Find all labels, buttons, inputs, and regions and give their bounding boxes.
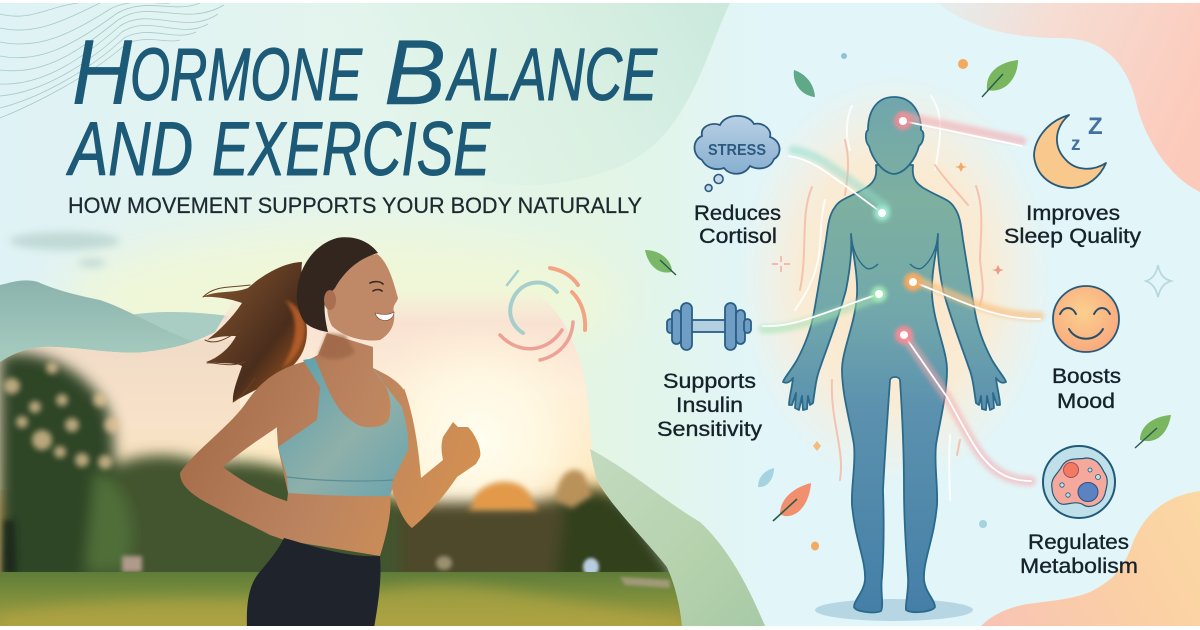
decorative leaves <box>645 53 1171 550</box>
label: reduces cortisol: Reduces <box>694 202 781 225</box>
illustration: human body silhouette <box>783 97 1006 612</box>
icon: leaf orange <box>780 483 811 516</box>
icon: stress cloud: STRESS <box>708 142 766 159</box>
subtitle: HOW MOVEMENT SUPPORTS YOUR BODY NATURALLY <box>68 193 642 218</box>
icon: dumbbell <box>667 303 751 350</box>
head <box>866 97 923 174</box>
connector: mood <box>904 273 1040 319</box>
body glow <box>757 98 1034 462</box>
title: B <box>384 22 446 124</box>
smile <box>375 312 394 321</box>
icon: moon <box>1034 113 1106 188</box>
ear <box>324 290 336 310</box>
panel: left soft background <box>251 3 696 518</box>
icon: swirl emblem <box>500 268 585 360</box>
sparkles <box>955 162 967 172</box>
scenery: mountains <box>0 280 228 366</box>
label: boosts mood: Mood <box>1057 390 1115 413</box>
decoration: bottom right orange blob <box>981 491 1200 626</box>
panel: warm haze behind runner <box>60 221 598 330</box>
energy wave lines <box>795 96 983 500</box>
panel: top mint blob <box>501 3 730 172</box>
back arm <box>392 388 480 528</box>
bokeh in tree <box>4 362 120 469</box>
label: improves sleep quality: Improves <box>1026 202 1120 225</box>
label: supports insulin sensitivity: Supports <box>663 370 756 393</box>
icon: stress cloud <box>694 116 780 191</box>
connector: metabolism <box>895 326 1031 481</box>
hair wisps <box>203 285 255 402</box>
title: ORMONE <box>130 33 363 116</box>
label: supports insulin sensitivity: Sensitivity <box>657 418 763 441</box>
icon: leaf top <box>794 70 815 97</box>
torso and neck <box>274 333 408 556</box>
distant people and path <box>122 556 142 572</box>
hair highlight <box>282 300 305 368</box>
ponytail <box>203 262 307 402</box>
scenery: cloud <box>10 232 120 267</box>
background: right panel <box>712 3 1200 626</box>
icon: leaf blue <box>758 468 774 487</box>
connector: cortisol <box>789 150 890 221</box>
photo: sunset park <box>0 290 700 630</box>
trees <box>0 353 690 626</box>
icon: moon: z <box>1071 134 1080 155</box>
front arm <box>180 362 303 543</box>
face <box>327 254 398 340</box>
ground shadow <box>815 599 973 621</box>
label: regulates metabolism: Regulates <box>1028 531 1129 554</box>
icon: smiley <box>1053 286 1119 352</box>
label: reduces cortisol: Cortisol <box>699 225 777 248</box>
label: improves sleep quality: Sleep Quality <box>1004 225 1142 248</box>
title <box>66 40 658 176</box>
icon: moon: Z <box>1088 113 1103 140</box>
icon: leaf top right <box>987 60 1018 91</box>
dots <box>958 59 968 69</box>
leggings <box>247 538 381 628</box>
illustration: woman running <box>180 237 480 628</box>
label: boosts mood: Boosts <box>1052 365 1121 388</box>
connector: insulin <box>763 286 887 329</box>
connector: sleep <box>894 112 1022 146</box>
sports top band <box>287 477 393 481</box>
green ribbon <box>590 449 765 626</box>
title: EXERCISE <box>212 107 491 192</box>
title: AND <box>66 107 193 192</box>
icon: metabolism cell <box>1043 446 1115 518</box>
eye and brow <box>370 282 383 291</box>
grass <box>0 572 700 630</box>
label: supports insulin sensitivity: Insulin <box>676 394 743 417</box>
label: regulates metabolism: Metabolism <box>1020 555 1138 578</box>
title: H <box>72 22 132 124</box>
icon: leaf left <box>645 250 672 273</box>
title: ALANCE <box>445 33 658 116</box>
icon: leaf right <box>1140 415 1171 441</box>
hair <box>297 237 378 332</box>
decoration: contour lines <box>0 2 224 118</box>
neck shade <box>318 333 355 359</box>
decoration: top right pink blob <box>938 3 1200 192</box>
sports top <box>278 358 408 496</box>
